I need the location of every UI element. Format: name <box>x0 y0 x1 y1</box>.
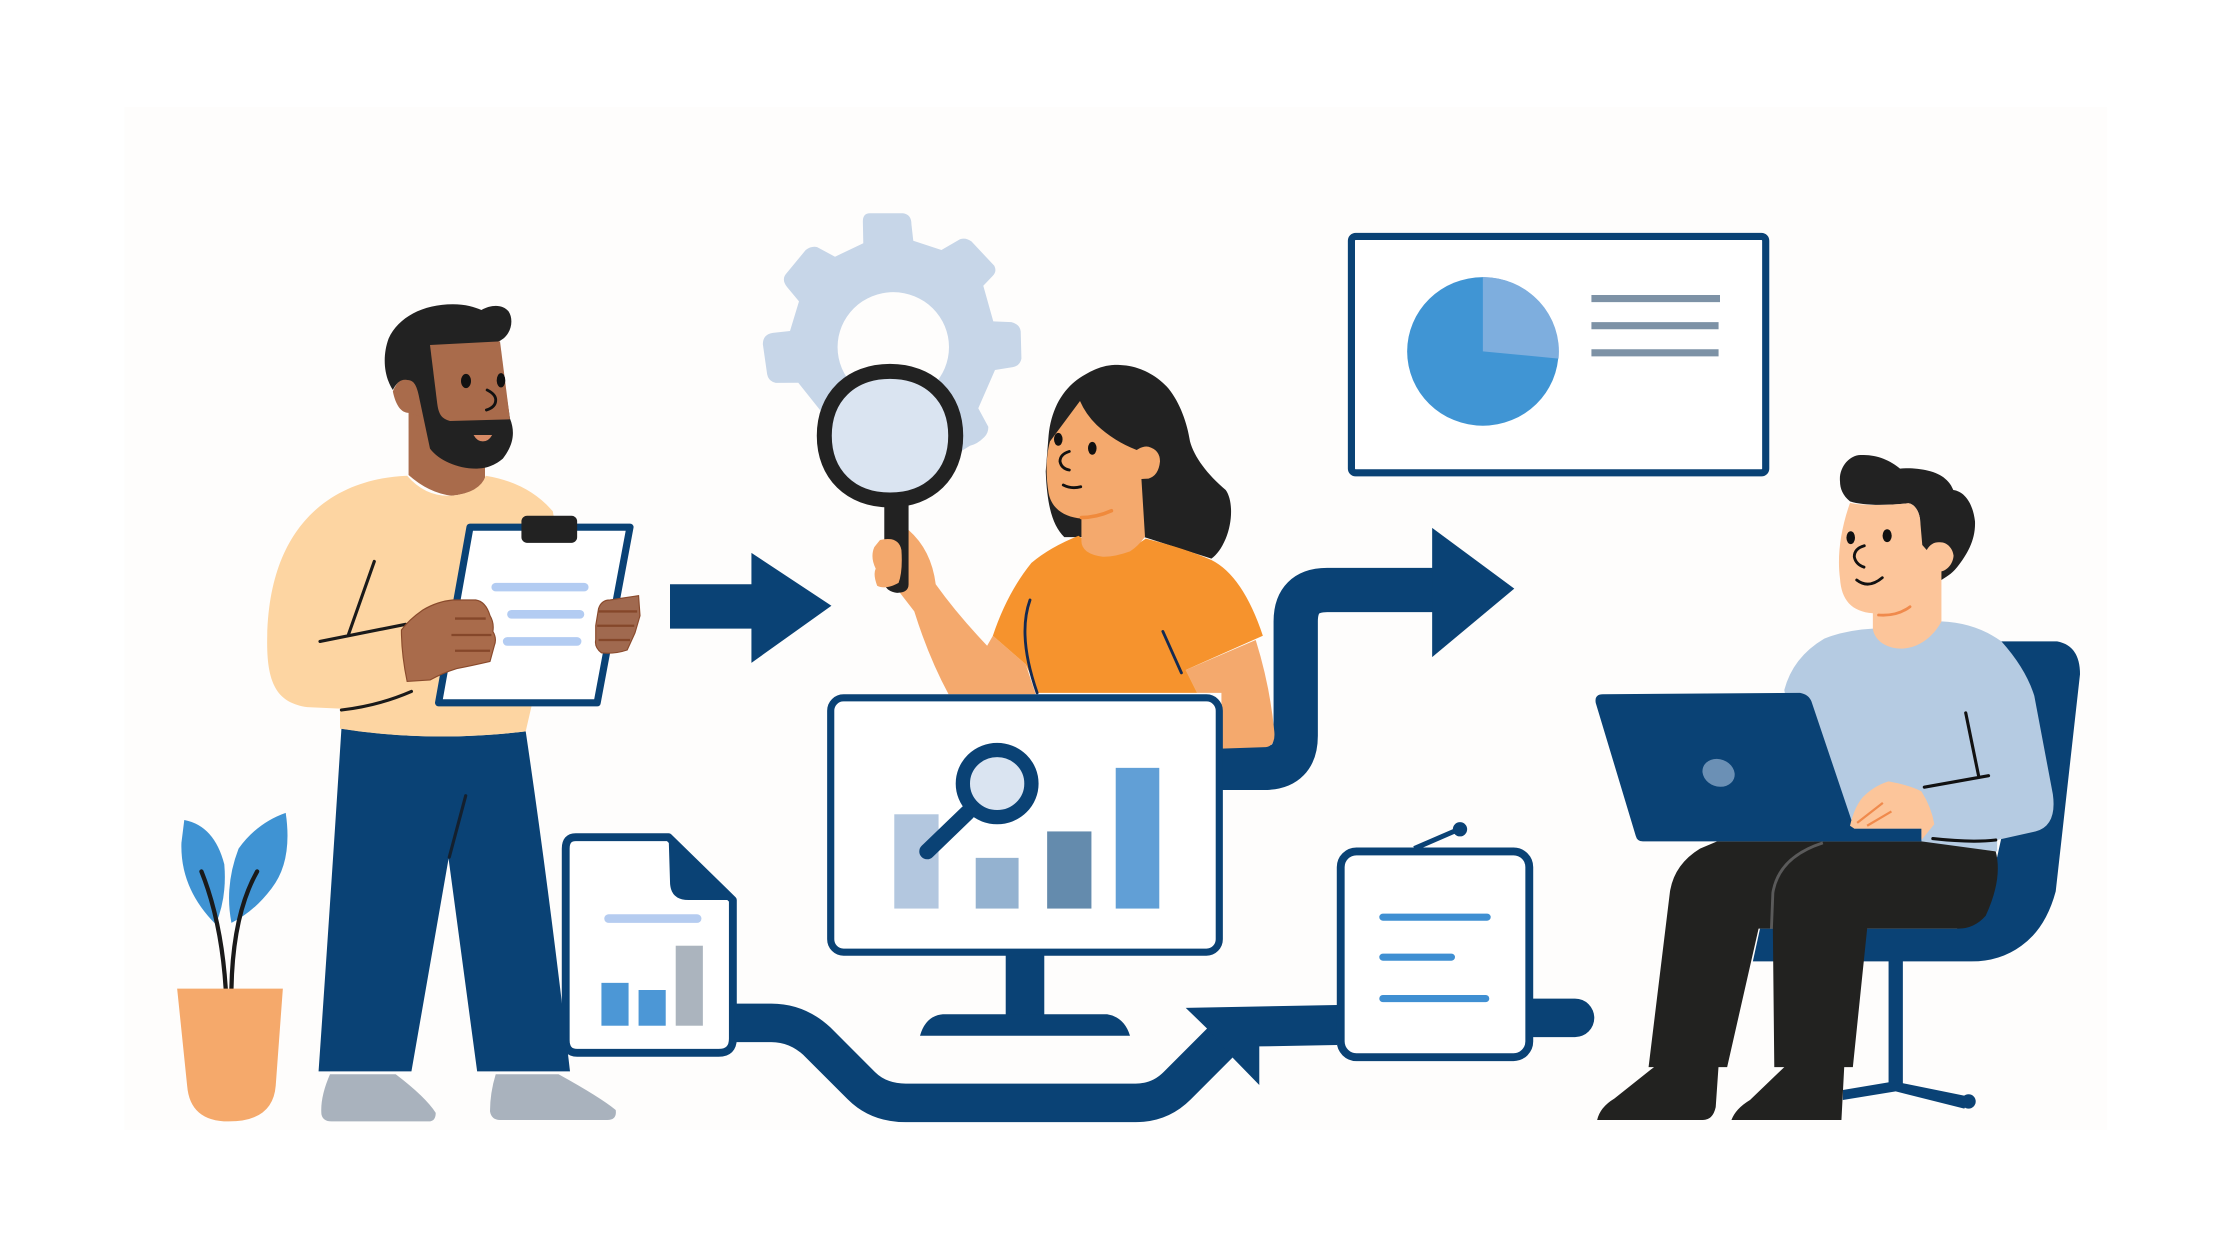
icon: gear <box>763 213 1021 471</box>
magnifier on chart <box>927 750 1031 851</box>
presentation board with pie chart <box>1351 236 1766 473</box>
man head <box>385 304 513 469</box>
man trousers <box>319 729 570 1071</box>
man sweater <box>267 476 557 737</box>
woman arm left <box>900 530 1036 694</box>
person: man with clipboard <box>267 304 640 1121</box>
tablet with text lines <box>1341 822 1529 1057</box>
laptop <box>1596 693 1921 841</box>
man head <box>1839 455 1975 649</box>
connector: lower path from document to tablet <box>734 1005 1337 1103</box>
connector: pill behind tablet <box>1514 999 1594 1037</box>
magnifying glass <box>824 371 956 593</box>
man trousers <box>1649 841 1998 1067</box>
arrow: first step <box>670 553 831 663</box>
woman shirt creases <box>1025 600 1181 693</box>
document with bar chart <box>566 834 736 1053</box>
sleeve creases <box>1924 713 1996 841</box>
person: man with laptop on chair <box>1596 455 2080 1120</box>
woman t-shirt <box>993 536 1263 693</box>
man arm creases <box>320 561 411 710</box>
man hands <box>401 596 640 681</box>
clipboard <box>439 516 630 703</box>
arrow: upper path to presentation board <box>1214 528 1514 768</box>
man sweater <box>1784 621 2054 851</box>
man hand <box>1850 781 1934 840</box>
person: woman with magnifier <box>824 365 1274 749</box>
plant <box>177 813 288 1121</box>
woman arm right <box>1186 640 1274 749</box>
man trouser crease <box>449 796 466 857</box>
man shoes <box>1597 1066 1844 1120</box>
man neck <box>409 400 485 496</box>
monitor with chart <box>831 698 1219 1036</box>
woman face and neck <box>1047 401 1160 557</box>
man shoes <box>321 1074 616 1121</box>
chair <box>1753 641 2080 1109</box>
woman fingers <box>872 539 902 587</box>
woman hair <box>1046 365 1231 559</box>
